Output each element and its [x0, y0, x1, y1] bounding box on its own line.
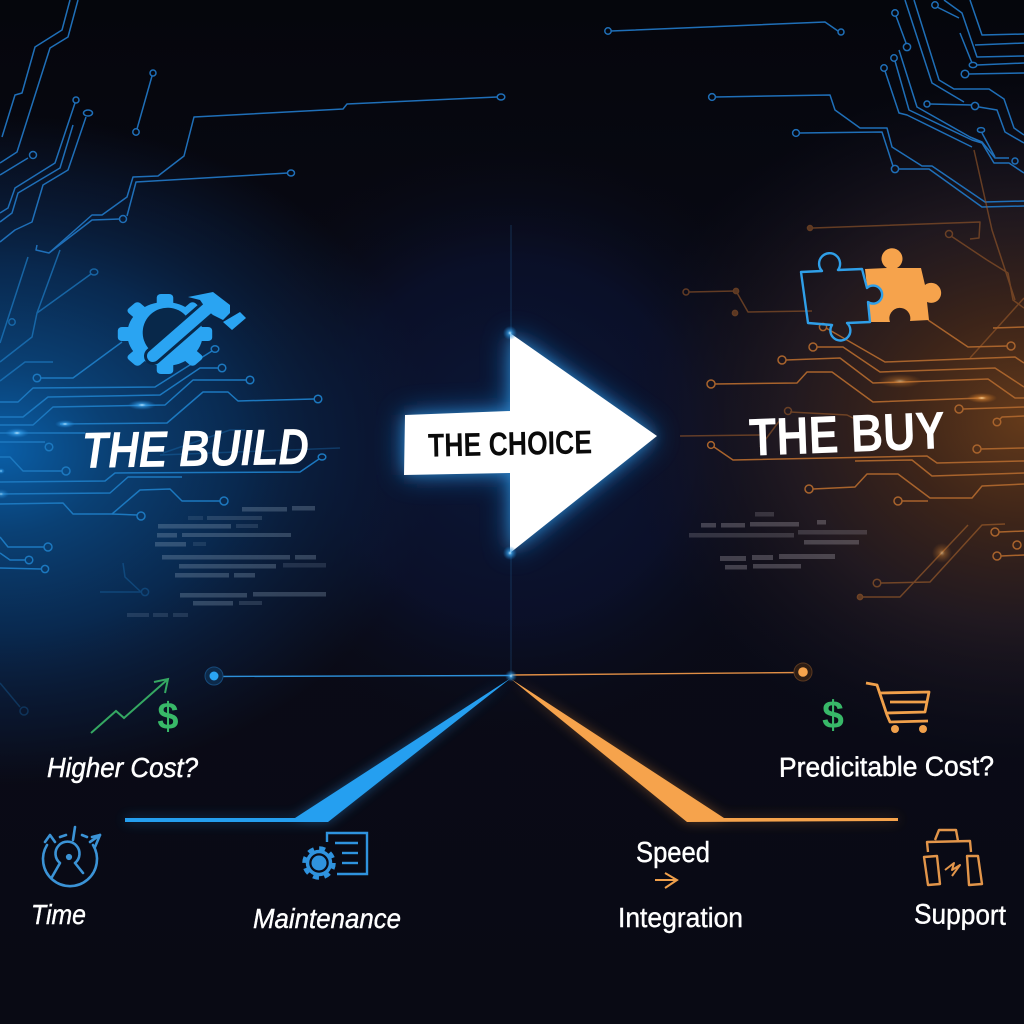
icon: gear and hammer [118, 292, 246, 374]
connector line: build [205, 667, 511, 685]
icon: puzzle pieces [801, 248, 941, 340]
icon: support [924, 830, 982, 885]
label: support: Support [914, 898, 1006, 931]
circuit traces: right middle [680, 150, 1024, 600]
label: higher cost: Higher Cost? [47, 752, 199, 783]
ramp: blue [125, 678, 511, 822]
heading: the build: THE BUILD [82, 418, 309, 479]
label: integration: Integration [618, 902, 743, 933]
choice arrow [404, 326, 657, 560]
label: maintenance: Maintenance [253, 903, 401, 934]
circuit traces: top right [605, 0, 1024, 207]
code lines: build side [127, 506, 326, 617]
glow spots [0, 374, 997, 563]
label: time: Time [31, 899, 86, 930]
icon: maintenance [304, 833, 367, 878]
center node [505, 670, 517, 682]
circuit traces: top left [0, 0, 505, 253]
heading: the buy: THE BUY [748, 401, 946, 468]
icon: dollar and cart [822, 683, 929, 737]
center vertical line [510, 225, 512, 680]
arrow label: THE CHOICE [428, 423, 592, 464]
label: predictable cost: Predicitable Cost? [779, 750, 994, 783]
code lines: buy side [689, 512, 867, 570]
icon: dollar and cart: $ [822, 694, 844, 737]
connector line: buy [511, 663, 812, 681]
icon: speed arrow [655, 873, 677, 888]
icon: rising cost: $ [157, 696, 179, 738]
circuit traces: left middle [0, 250, 340, 715]
icon: time [43, 827, 100, 886]
ramp: orange [511, 679, 898, 822]
label: speed: Speed [636, 837, 710, 869]
icon: rising cost [91, 679, 179, 738]
